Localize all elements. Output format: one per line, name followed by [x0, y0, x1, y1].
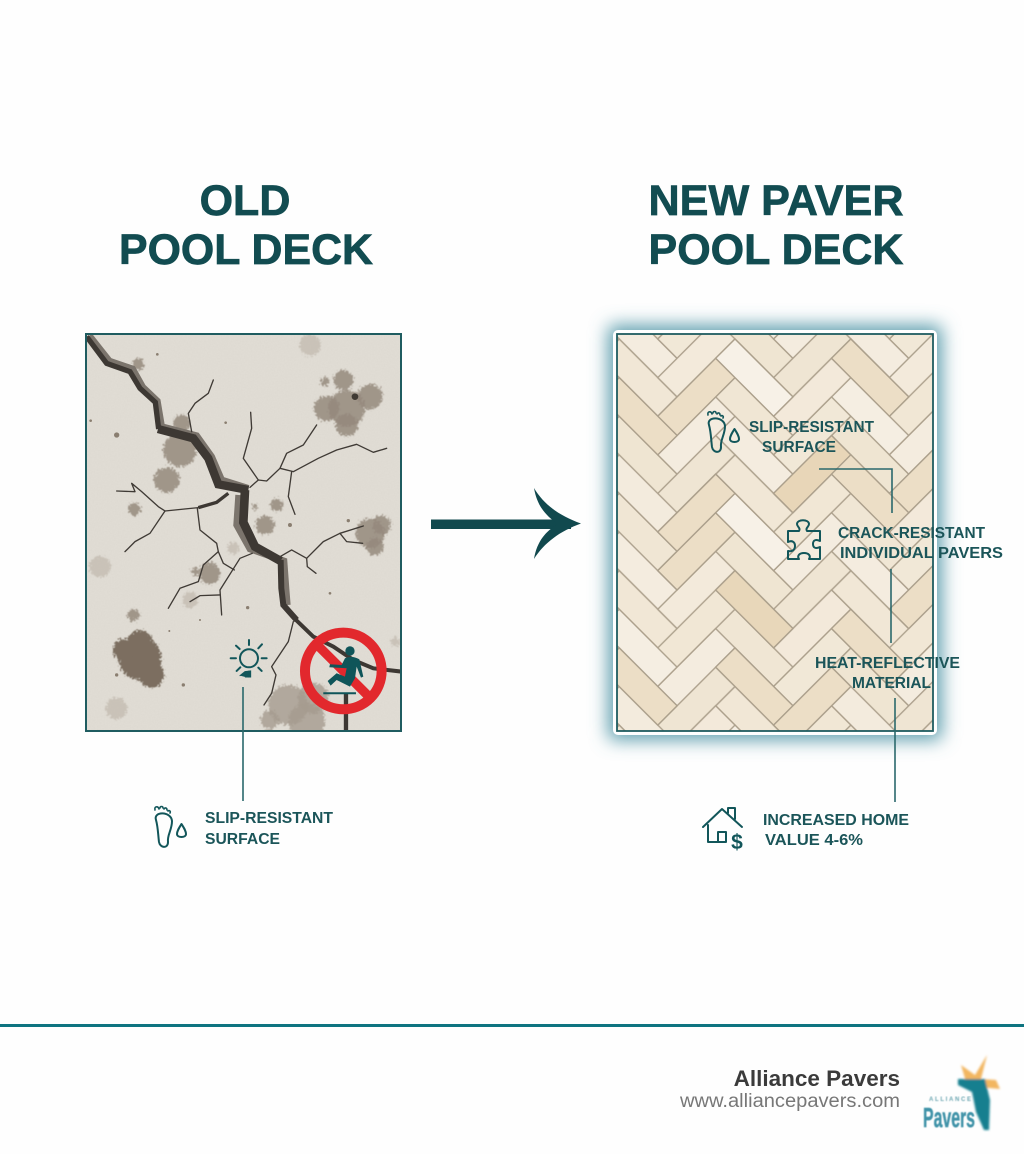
icon: puzzle piece — [788, 520, 820, 559]
label: increased home value: VALUE 4-6% — [765, 832, 863, 849]
panel: old cracked concrete deck — [86, 334, 402, 740]
label: crack-resistant individual pavers — [788, 520, 1003, 562]
title: new paver pool deck: NEW PAVER — [648, 177, 904, 225]
connector line: old deck — [242, 687, 244, 801]
title: old pool deck: POOL DECK — [119, 226, 373, 274]
title: old pool deck: OLD — [200, 177, 290, 225]
footer divider — [0, 1024, 1024, 1027]
label: increased home value — [703, 808, 909, 854]
label: old deck slip surface: SURFACE — [205, 831, 280, 848]
title: new paver pool deck: POOL DECK — [648, 226, 904, 274]
label: new deck slip-resistant surface — [708, 412, 874, 456]
title: old pool deck — [119, 177, 373, 274]
label: heat-reflective material: HEAT-REFLECTIVE — [815, 655, 960, 672]
logo: Alliance Pavers: ALLIANCE — [929, 1097, 971, 1103]
stains on concrete — [87, 334, 402, 740]
slipping person — [323, 646, 363, 693]
icon: foot and water drop — [155, 806, 186, 847]
label: crack-resistant individual pavers: CRACK-RESISTANT — [838, 525, 985, 542]
panel: new herringbone paver deck — [594, 310, 956, 754]
main crack — [87, 337, 402, 732]
arrow — [431, 488, 581, 559]
footer: company name and url — [679, 1066, 900, 1112]
label: heat-reflective material — [815, 655, 960, 692]
label: old deck slip surface — [155, 806, 333, 848]
logo: Alliance Pavers — [923, 1055, 1000, 1133]
icon: sun — [231, 640, 267, 677]
label: crack-resistant individual pavers: INDIVIDUAL PAVERS — [840, 545, 1003, 562]
connector lines: new deck — [819, 469, 895, 802]
icon: house with dollar sign: $ — [731, 831, 743, 854]
hairline cracks — [117, 380, 387, 705]
footer: company name and url: Alliance Pavers — [734, 1066, 900, 1091]
title: new paver pool deck — [648, 177, 904, 274]
icon: foot and water drop — [708, 412, 739, 452]
footer: company name and url: www.alliancepavers.com — [679, 1091, 900, 1112]
icon: no-slip warning sign — [305, 633, 382, 709]
logo: Alliance Pavers: Pavers — [923, 1102, 975, 1133]
label: increased home value: INCREASED HOME — [763, 812, 909, 829]
darker tan pavers — [618, 338, 932, 730]
main crack shadow — [89, 336, 287, 605]
label: heat-reflective material: MATERIAL — [852, 675, 931, 692]
label: old deck slip surface: SLIP-RESISTANT — [205, 810, 333, 827]
icon: house with dollar sign — [703, 808, 743, 854]
label: new deck slip-resistant surface: SURFACE — [762, 439, 836, 456]
label: new deck slip-resistant surface: SLIP-RESISTANT — [749, 419, 874, 436]
